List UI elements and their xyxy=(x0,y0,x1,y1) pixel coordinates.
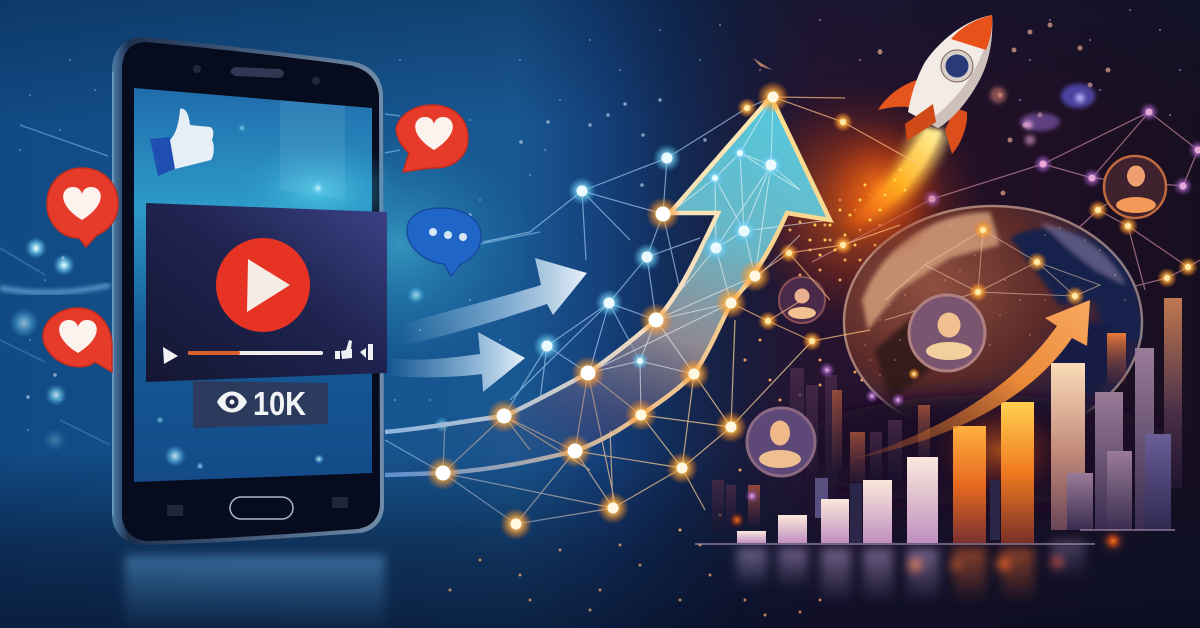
sparkle nodes near bars xyxy=(729,362,1122,550)
bar 15 xyxy=(1145,434,1171,530)
network lines, right xyxy=(812,112,1200,290)
phone home button xyxy=(230,497,293,519)
avatar 2 xyxy=(909,295,985,371)
user avatars xyxy=(747,156,1166,476)
globe city lights xyxy=(865,225,1125,375)
bar 13 xyxy=(1107,451,1132,530)
small dart xyxy=(753,58,772,70)
network nodes, right xyxy=(922,102,1200,288)
phone side reflection xyxy=(112,72,114,515)
screen streak xyxy=(280,100,345,200)
control: progress bar xyxy=(188,351,323,355)
big growth arrow xyxy=(385,97,830,475)
heart bubble left lower xyxy=(43,308,112,372)
bar 14 xyxy=(1164,298,1182,488)
bar 5 xyxy=(907,457,938,543)
arrow outline upper xyxy=(385,97,771,432)
avatar 1 xyxy=(779,277,825,323)
globe network xyxy=(885,230,1100,320)
background flow lines, left xyxy=(0,114,540,445)
rocket flame xyxy=(810,120,950,260)
phone front xyxy=(122,42,380,541)
phone shell xyxy=(112,37,384,545)
phone speaker xyxy=(230,67,284,78)
bar 3 xyxy=(821,499,849,543)
globe land masses xyxy=(862,212,1143,400)
rocket right fin xyxy=(945,108,967,154)
glowing particles, left xyxy=(9,237,450,452)
rocket body xyxy=(908,15,992,128)
bar 2 xyxy=(778,515,807,543)
phone screen xyxy=(134,88,372,482)
network nodes, main xyxy=(426,81,853,540)
avatar 3 xyxy=(747,408,815,476)
white arrow upper xyxy=(400,258,587,345)
avatar 4 xyxy=(1104,156,1166,218)
icon: eye xyxy=(217,392,247,412)
phone soft key right xyxy=(332,497,348,508)
globe bottom fade xyxy=(795,395,1175,505)
screen sparkles xyxy=(156,124,326,470)
globe rim xyxy=(844,206,1142,438)
view count text: 10K xyxy=(253,385,306,422)
heart bubble right xyxy=(396,105,468,172)
rocket nose cone xyxy=(951,15,992,50)
phone camera right xyxy=(312,77,320,85)
globe xyxy=(843,205,1143,439)
heart bubble left upper xyxy=(47,168,118,247)
control: speaker xyxy=(360,344,373,360)
bar 10 xyxy=(1067,473,1093,530)
arrow body xyxy=(385,97,830,475)
bar 7 xyxy=(1001,402,1034,543)
bar 9 xyxy=(1095,392,1123,530)
view count badge xyxy=(193,381,328,428)
orange trend arrow xyxy=(850,300,1090,460)
icon: thumbs up xyxy=(150,109,214,176)
phone soft key left xyxy=(167,505,183,516)
bar 12 xyxy=(1135,348,1154,530)
control: thumb xyxy=(335,340,352,359)
bar 4 xyxy=(863,480,892,543)
network lines, blue to orange xyxy=(385,97,920,524)
purple nebula cluster xyxy=(990,84,1095,145)
control: small play xyxy=(163,347,178,364)
bar 11 xyxy=(1107,333,1126,383)
floor reflection xyxy=(125,536,1118,628)
phone camera left xyxy=(193,65,201,73)
chart baseline xyxy=(695,530,1175,544)
rocket left fin xyxy=(878,80,917,110)
smartphone xyxy=(112,37,403,545)
chat bubble blue xyxy=(407,208,481,276)
screen glow xyxy=(233,140,403,240)
bar chart xyxy=(695,298,1182,544)
rocket window xyxy=(941,50,973,82)
background dim bars xyxy=(712,368,1000,543)
arrow outline lower xyxy=(385,97,830,475)
bar glow xyxy=(935,400,1065,500)
video player panel xyxy=(146,203,387,382)
rocket xyxy=(878,15,992,154)
bar 1 xyxy=(737,531,766,543)
arrow mesh xyxy=(588,97,830,415)
reflected sparkles xyxy=(450,545,820,615)
white arrow lower xyxy=(388,332,525,392)
bar 6 xyxy=(953,426,986,543)
bar 8 xyxy=(1051,363,1085,530)
play button xyxy=(216,238,310,332)
rocket center fin xyxy=(905,104,936,141)
